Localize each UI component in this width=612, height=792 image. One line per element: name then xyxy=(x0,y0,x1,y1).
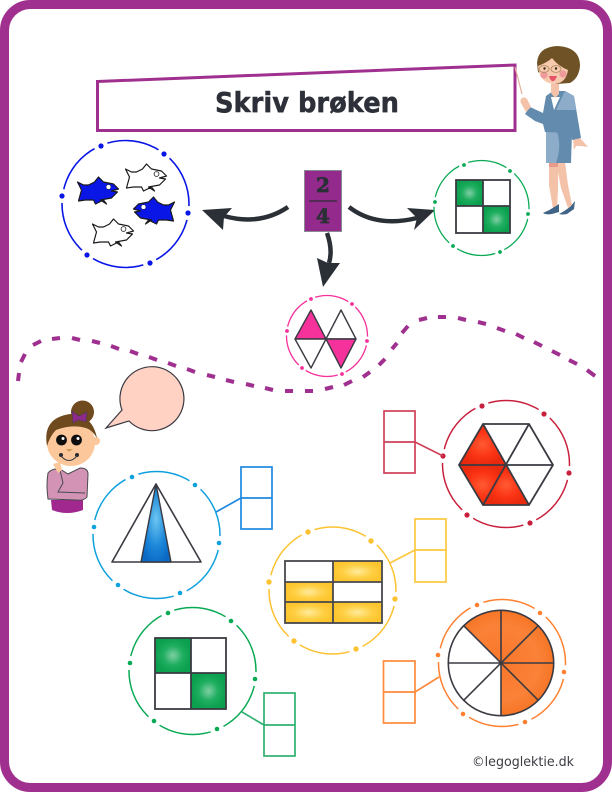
answer box blue xyxy=(216,467,272,529)
copyright: ©legoglektie.dk xyxy=(472,754,574,770)
exercise: hexagon circle xyxy=(384,399,576,530)
example: fish circle xyxy=(55,139,195,270)
exercise: rectangle circle xyxy=(262,519,446,656)
fraction card 2/4: 4 xyxy=(316,204,330,228)
exercise: green square circle xyxy=(123,606,295,756)
answer box orange xyxy=(384,661,439,723)
blue fish mirrored xyxy=(134,197,174,224)
fraction card 2/4 xyxy=(304,170,342,232)
speech bubble xyxy=(106,367,184,431)
answer box red xyxy=(384,411,443,473)
white fish lower xyxy=(92,219,134,246)
arrow to green square xyxy=(349,207,435,230)
arrow to fish xyxy=(202,207,288,230)
teacher illustration xyxy=(515,46,588,214)
blue fish xyxy=(78,177,118,204)
arrow to pink triangles xyxy=(317,233,340,287)
girl illustration xyxy=(46,400,100,513)
fraction card 2/4: 2 xyxy=(316,173,330,197)
title banner xyxy=(98,65,515,130)
answer box green xyxy=(242,693,295,756)
answer box yellow xyxy=(390,519,446,582)
white fish xyxy=(126,164,166,191)
exercise: pie circle xyxy=(384,598,571,729)
title text: Skriv brøken xyxy=(215,86,399,119)
exercise: triangle circle xyxy=(87,467,272,600)
example: green square circle xyxy=(430,160,533,257)
example: pink triangles circle xyxy=(282,294,372,378)
dashed divider xyxy=(18,317,595,391)
